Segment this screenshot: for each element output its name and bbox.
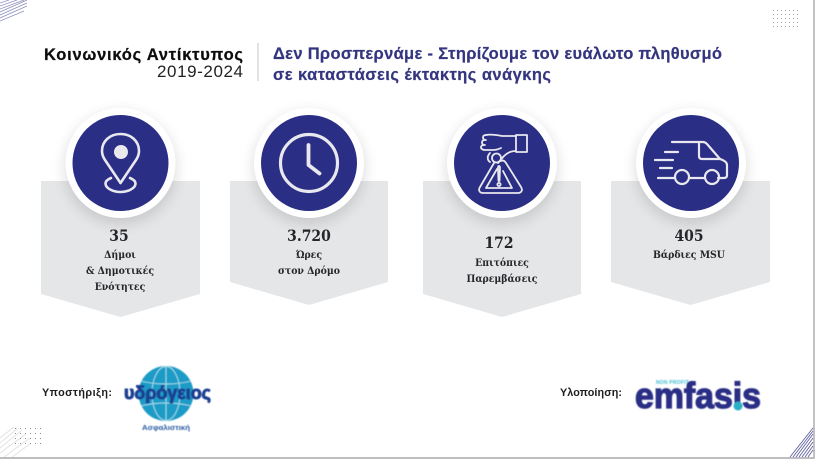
value: 35 municipalities: Ενότητες <box>95 281 146 293</box>
value: 172 interventions: Παρεμβάσεις <box>467 273 538 285</box>
decoration: bottom-left stripes <box>0 427 30 457</box>
icon: clock <box>280 134 338 192</box>
value: 172 interventions: Επιτόπιες <box>475 257 529 269</box>
panel: on-site interventions <box>423 108 581 317</box>
icon: hand holding warning triangle <box>479 135 527 193</box>
subtitle <box>273 45 722 84</box>
decoration: bottom-left dots <box>15 428 41 444</box>
logo: Emfasis: NON PROFIT <box>656 380 689 386</box>
support label: Υποστήριξη: <box>42 387 112 399</box>
decoration: bottom-right stripes <box>790 428 813 457</box>
panel: hours on the road <box>230 108 388 305</box>
icon: map pin <box>102 134 139 192</box>
panel: MSU shifts <box>611 108 770 305</box>
value: 35 municipalities <box>86 226 154 293</box>
value: 3.720 hours: Ώρες <box>295 249 322 261</box>
header divider <box>257 43 259 81</box>
title: social impact <box>44 46 243 81</box>
panel: municipalities <box>41 108 200 317</box>
value: 3.720 hours <box>278 226 340 277</box>
value: 405 shifts: Βάρδιες MSU <box>653 249 725 261</box>
value: 35 municipalities: Δήμοι <box>104 248 136 261</box>
value: 405 shifts: 405 <box>674 226 704 245</box>
title: social impact: 2019-2024 <box>157 62 243 81</box>
value: 172 interventions: 172 <box>484 233 514 252</box>
value: 172 interventions <box>467 233 538 285</box>
decoration: top-right dots <box>773 10 798 27</box>
icon: moving van <box>655 142 727 184</box>
circle badge: van <box>635 108 747 224</box>
title: social impact: Κοινωνικός Αντίκτυπος <box>44 46 243 64</box>
subtitle: Δεν Προσπερνάμε - Στηρίζουμε τον ευάλωτο πληθυσμό <box>273 45 722 63</box>
implementation label: Υλοποίηση: <box>560 387 622 399</box>
circle badge: hand with warning sign <box>446 108 558 224</box>
decoration: top-left stripes <box>0 0 27 21</box>
value: 405 shifts <box>653 226 725 261</box>
logo: Ydrogeios: υδρόγειος <box>124 382 211 403</box>
logo: Ydrogeios <box>124 366 211 432</box>
value: 35 municipalities: 35 <box>109 226 129 245</box>
circle badge: clock <box>253 108 365 224</box>
logo: Emfasis: emfasis <box>635 375 761 416</box>
circle badge: location <box>64 108 176 224</box>
subtitle: σε καταστάσεις έκτακτης ανάγκης <box>273 66 551 84</box>
logo: Ydrogeios: Ασφαλιστική <box>142 423 190 432</box>
value: 3.720 hours: στον Δρόμο <box>278 265 340 277</box>
value: 35 municipalities: & Δημοτικές <box>86 265 154 277</box>
value: 3.720 hours: 3.720 <box>287 226 331 245</box>
